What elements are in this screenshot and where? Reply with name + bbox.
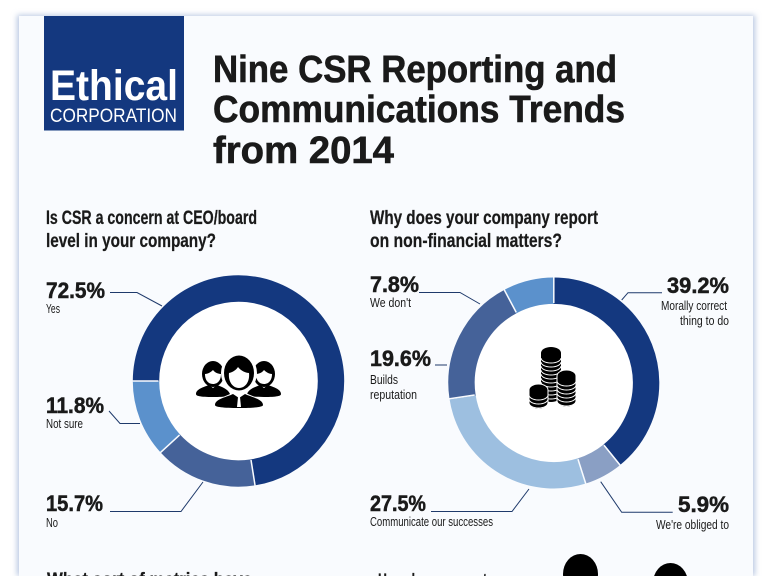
logo: Ethical Corporation: Ethical <box>50 62 178 110</box>
label: 15.7% No: No <box>46 516 58 530</box>
label: 15.7% No: 15.7% <box>46 491 103 516</box>
label: 11.8% Not sure <box>46 393 140 431</box>
label: 72.5% Yes <box>46 278 162 316</box>
label: 5.9% We're obliged to: 5.9% <box>678 492 729 517</box>
heading: CSR concern question: Is CSR a concern at CEO/board <box>46 208 257 229</box>
title <box>213 49 625 172</box>
heading: CSR concern question: level in your company? <box>46 231 216 252</box>
label: 5.9% We're obliged to: We're obliged to <box>656 518 729 532</box>
label: 27.5% Communicate our successes: 27.5% <box>370 491 426 516</box>
heading: CSR concern question <box>46 208 257 252</box>
label: 11.8% Not sure: 11.8% <box>46 393 104 418</box>
label: 72.5% Yes: 72.5% <box>46 278 105 303</box>
label: 11.8% Not sure: Not sure <box>46 417 83 431</box>
label: 15.7% No <box>46 482 203 530</box>
label: 72.5% Yes: Yes <box>46 302 60 316</box>
label: 19.6% Builds reputation: Builds <box>370 373 398 387</box>
label: 39.2% Morally correct thing to do: thing to do <box>680 314 729 328</box>
logo: Ethical Corporation <box>44 16 184 130</box>
label: 27.5% Communicate our successes <box>370 489 529 529</box>
donut chart: CSR concern <box>108 250 369 512</box>
label: 39.2% Morally correct thing to do: 39.2% <box>667 273 729 298</box>
label: 7.8% We don't: We don't <box>370 296 411 310</box>
heading: non-financial reporting question <box>370 208 599 252</box>
label: 7.8% We don't: 7.8% <box>370 272 419 297</box>
label: 19.6% Builds reputation <box>370 346 447 402</box>
icon: coin stacks <box>529 347 576 409</box>
heading: non-financial reporting question: Why does your company report <box>370 208 599 229</box>
title: Communications Trends <box>213 89 625 131</box>
label: 27.5% Communicate our successes: Communicate our successes <box>370 515 493 529</box>
heading: non-financial reporting question: on non-financial matters? <box>370 231 562 252</box>
label: 39.2% Morally correct thing to do: Morally correct <box>661 299 727 313</box>
donut chart: reasons for reporting <box>424 253 684 513</box>
label: 7.8% We don't <box>370 272 480 310</box>
label: 19.6% Builds reputation: reputation <box>370 388 417 402</box>
title: Nine CSR Reporting and <box>213 49 617 91</box>
label: 19.6% Builds reputation: 19.6% <box>370 346 431 371</box>
logo: Ethical Corporation: CORPORATION <box>50 105 177 127</box>
icon: silhouette heads, cut off by page edge <box>563 554 688 576</box>
label: 5.9% We're obliged to <box>601 482 729 532</box>
title: from 2014 <box>213 130 394 172</box>
icon: three business people <box>196 353 281 408</box>
label: 39.2% Morally correct thing to do <box>622 273 729 328</box>
